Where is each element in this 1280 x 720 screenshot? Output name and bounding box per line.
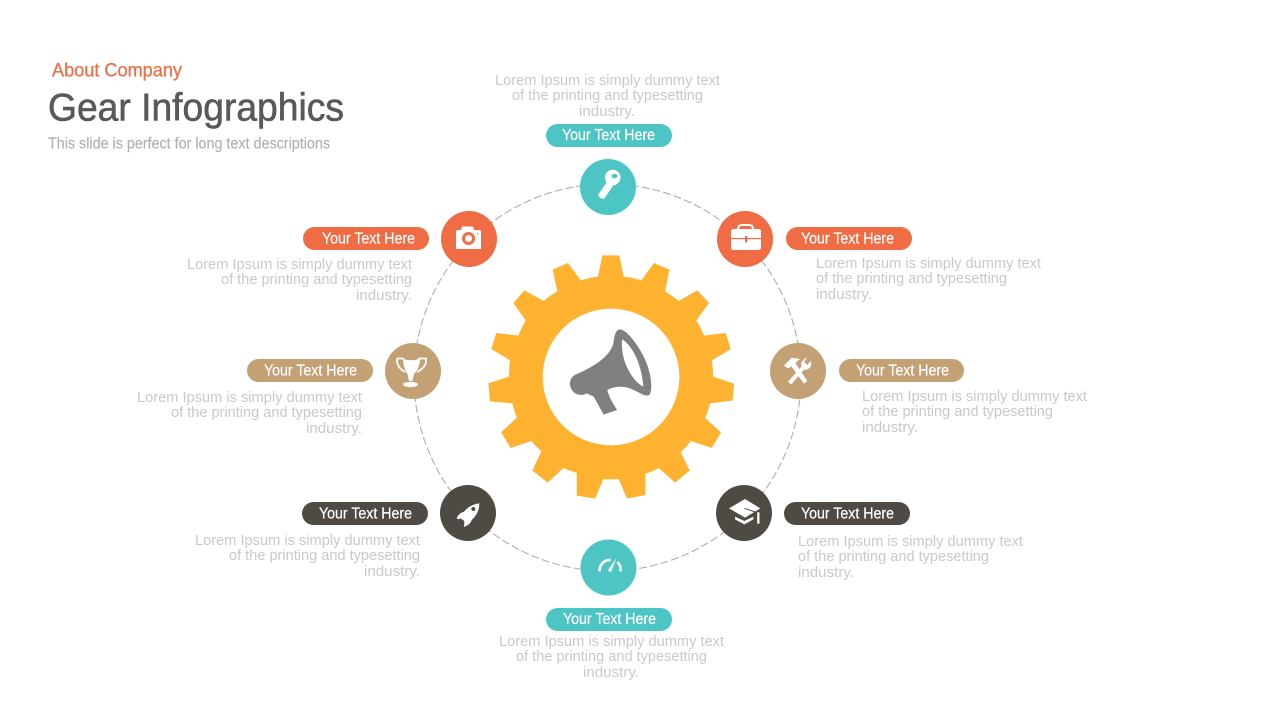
lower right pill [784,502,910,525]
lower left description: industry. [364,563,420,580]
right description: industry. [862,419,918,436]
right circle with tools icon [770,343,826,399]
lower right circle with cap icon [716,485,772,541]
subtitle: This slide is perfect for long text descriptions [48,136,330,152]
left description: of the printing and typesetting [171,404,362,421]
bottom pill [546,608,672,631]
lower right description: Lorem Ipsum is simply dummy text [798,533,1024,550]
node: bottom gauge [499,540,725,681]
lower left pill: Your Text Here [319,506,412,522]
bottom description: of the printing and typesetting [516,648,707,665]
upper left description: of the printing and typesetting [221,271,412,288]
upper right description: Lorem Ipsum is simply dummy text [816,255,1042,272]
node: right tools [770,343,1088,436]
icon: megaphone [570,329,651,415]
upper left description: industry. [356,287,412,304]
upper right circle with briefcase icon [717,211,773,267]
top pill [546,124,672,147]
node: lower left rocket [195,485,496,580]
upper left circle with camera icon [441,211,497,267]
top description: of the printing and typesetting [512,87,703,104]
lower left description: of the printing and typesetting [229,547,420,564]
bottom description: industry. [583,664,639,681]
bottom circle with gauge icon [580,540,636,596]
top pill: Your Text Here [562,127,655,144]
lower left description: Lorem Ipsum is simply dummy text [195,532,421,549]
left description [137,389,363,437]
upper left pill [303,227,429,250]
top circle with key icon [580,159,636,215]
lower left description [195,532,421,580]
upper left description [187,256,413,304]
top description: Lorem Ipsum is simply dummy text [495,72,721,89]
lower right description: industry. [798,564,854,581]
dashed ring [414,184,801,571]
right pill: Your Text Here [856,362,949,380]
lower right description [798,533,1024,581]
right description: Lorem Ipsum is simply dummy text [862,388,1088,405]
eyebrow: About Company: About Company [52,60,182,82]
lower right pill: Your Text Here [801,506,894,522]
lower left circle with rocket icon [440,485,496,541]
node: left trophy [137,343,441,437]
bottom pill: Your Text Here [563,611,656,628]
upper right description [816,255,1042,303]
gear body [488,255,734,499]
node: top key [495,72,721,215]
left description: Lorem Ipsum is simply dummy text [137,389,363,406]
title block [48,60,344,152]
upper left pill: Your Text Here [322,230,415,248]
left pill [247,359,373,382]
left description: industry. [306,420,362,437]
top description: industry. [579,103,635,120]
right description: of the printing and typesetting [862,403,1053,420]
upper right description: industry. [816,286,872,303]
upper right pill [786,227,912,250]
upper right pill: Your Text Here [801,230,894,248]
bottom description [499,633,725,681]
left pill: Your Text Here [264,362,357,380]
node: upper left camera [187,211,497,304]
left circle with trophy icon [385,343,441,399]
right description [862,388,1088,436]
bottom description: Lorem Ipsum is simply dummy text [499,633,725,650]
lower left pill [302,502,428,525]
gear hub [543,309,679,445]
heading: Gear Infographics: Gear Infographics [48,86,344,130]
top description [495,72,721,120]
node: lower right graduation cap [716,485,1024,581]
node: upper right briefcase [717,211,1042,303]
upper left description: Lorem Ipsum is simply dummy text [187,256,413,273]
lower right description: of the printing and typesetting [798,548,989,565]
upper right description: of the printing and typesetting [816,270,1007,287]
right pill [839,359,964,382]
central gear [488,255,734,499]
